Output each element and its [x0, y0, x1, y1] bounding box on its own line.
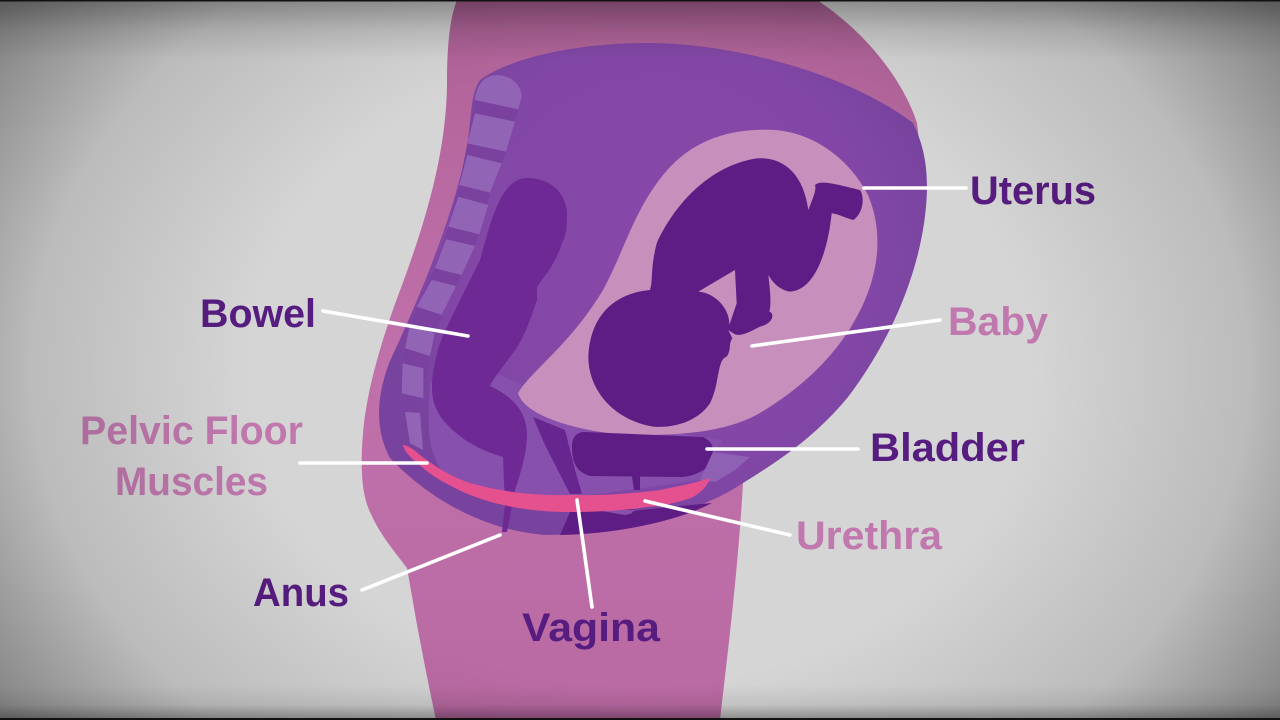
label: Pelvic Floor Muscles: Muscles — [115, 460, 268, 504]
label: Baby: Baby — [948, 300, 1049, 344]
panel: body silhouette — [362, 0, 925, 720]
top shadow — [0, 0, 1280, 60]
leader lines — [300, 188, 966, 607]
panel: bladder — [572, 432, 713, 477]
label: Urethra: Urethra — [796, 514, 943, 558]
line: baby — [752, 320, 940, 346]
panel: tissue beside bladder — [700, 452, 750, 482]
top edge — [0, 0, 1280, 2]
panel: spine column — [402, 97, 522, 398]
label: Bladder: Bladder — [870, 426, 1025, 470]
icon: baby silhouette — [588, 158, 863, 427]
bottom shadow — [0, 685, 1280, 718]
panel: urethra — [632, 476, 640, 490]
line: bowel — [323, 311, 468, 336]
panel: pelvic floor muscles band — [403, 445, 710, 512]
panel: lower vaginal canal — [560, 503, 712, 535]
label: Pelvic Floor Muscles — [80, 409, 303, 504]
panel: amniotic sac — [518, 130, 877, 435]
line: anus — [362, 535, 500, 590]
line: urethra — [645, 501, 790, 535]
label: Vagina: Vagina — [522, 606, 661, 650]
label: Bowel: Bowel — [200, 292, 316, 336]
line: pelvic floor muscles — [300, 461, 427, 465]
panel: lower pelvic tissue — [429, 375, 722, 505]
line: bladder — [707, 447, 858, 451]
bottom edge — [0, 718, 1280, 720]
panel: vagina — [533, 417, 582, 494]
panel: perineal tissue — [596, 510, 640, 515]
panel: abdominal cavity — [379, 43, 927, 535]
line: vagina — [577, 500, 592, 607]
label: Pelvic Floor Muscles: Pelvic Floor — [80, 409, 303, 453]
label: Uterus: Uterus — [970, 169, 1096, 213]
line: uterus — [864, 186, 966, 190]
panel: bowel — [432, 178, 567, 532]
icon: spine vertebrae — [402, 75, 522, 450]
label: Anus: Anus — [253, 571, 349, 615]
